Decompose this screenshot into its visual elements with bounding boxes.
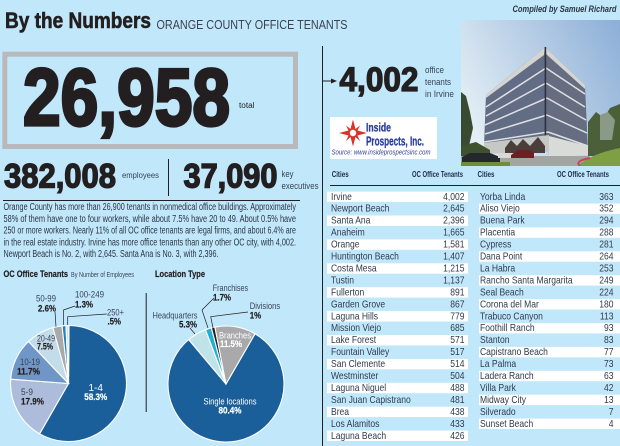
table: cities column 2: 77 (604, 347, 614, 357)
table: cities column 2: 180 (599, 299, 614, 309)
table: cities column 1: 571 (450, 335, 464, 345)
curb (578, 158, 590, 166)
table: cities column 1: 685 (450, 323, 464, 333)
stat: Irvine tenants: tenants (425, 77, 451, 88)
stat: Irvine tenants: office (425, 65, 444, 76)
table: cities column 1: Anaheim (331, 227, 365, 238)
slice labels: 250+ (107, 308, 124, 318)
table: cities column 1: Brea (331, 406, 350, 417)
stat: employees: 382,008 (4, 158, 116, 196)
slice labels: 11.5% (220, 339, 242, 350)
table: cities column 2: 7 (609, 406, 614, 417)
slice labels: 50-99 (36, 294, 56, 304)
table: cities column 1: Fountain Valley (331, 347, 390, 357)
table: cities column 2: 294 (599, 215, 614, 226)
slice labels: 2.6% (38, 304, 56, 314)
table: cities column 1: 433 (450, 418, 464, 429)
table header: second column: Cities (478, 169, 495, 179)
table: cities column 2: 363 (599, 191, 614, 202)
heading: location chart: Location Type (155, 269, 205, 280)
table: cities column 2: Placentia (480, 227, 516, 238)
table: cities column 2: 253 (599, 263, 614, 274)
table: cities column 2: Dana Point (480, 251, 523, 262)
slice labels (17, 290, 124, 408)
slice labels: 11.7% (17, 366, 40, 378)
total number: 26,958 (23, 53, 230, 143)
slice labels: 100-249 (75, 290, 104, 300)
slice labels: 1-4 (88, 383, 103, 394)
text block: summary: Newport Beach is No. 2, with 2,645. Santa Ana is No. 3, with 2,396. (4, 249, 218, 260)
table: cities column 1: Costa Mesa (331, 263, 377, 274)
leader lines (190, 298, 248, 334)
table: cities column 2: 42 (604, 382, 614, 393)
table: cities column 1: 426 (450, 430, 464, 441)
slice labels: 1.3% (75, 300, 93, 310)
table: cities column 1: 1,215 (443, 263, 464, 274)
table: cities column 1: Lake Forest (331, 335, 376, 345)
shrubs (505, 137, 545, 153)
table: cities column 1: 1,581 (443, 239, 464, 250)
table: cities column 2: Aliso Viejo (480, 203, 520, 214)
text block: summary: 58% of them have one to four workers, while about 7.5% have 20 to 49. About 0.5% have (4, 214, 296, 225)
slice labels: 1.7% (213, 292, 231, 304)
table: cities column 2: 288 (599, 227, 614, 238)
roof edge (486, 47, 545, 98)
table: cities column 1: 891 (450, 287, 464, 298)
table: cities column 1: Laguna Hills (331, 311, 378, 321)
table: cities column 2: Silverado (480, 406, 516, 417)
slice labels: Single locations (204, 396, 257, 408)
table: cities column 1: San Juan Capistrano (331, 394, 411, 405)
lower level (549, 136, 588, 158)
pie chart: location type (152, 283, 284, 442)
table: cities column 1: 1,137 (443, 275, 464, 286)
slice labels: 17.9% (21, 396, 44, 408)
arrow (323, 80, 332, 82)
table: cities column 2: Capistrano Beach (480, 347, 548, 357)
table: cities column 2: Cypress (480, 239, 512, 250)
table: cities column 2: Stanton (480, 335, 509, 345)
table: cities column 2: Seal Beach (480, 287, 524, 298)
slice labels: 80.4% (218, 406, 242, 416)
table header: first column: Cities (332, 169, 349, 179)
table: cities column 1: Santa Ana (331, 215, 371, 226)
icon: compass star (339, 120, 367, 146)
table: cities column 1: 517 (450, 347, 464, 357)
table: cities column 1: Newport Beach (331, 203, 389, 214)
table: cities column 1: 438 (450, 406, 464, 417)
table: cities column 1: San Clemente (331, 359, 385, 369)
table: cities column 2: 113 (600, 311, 614, 321)
logo: Inside Prospects (330, 117, 437, 159)
table: cities column 1: Orange (331, 239, 360, 250)
table: cities column 2: 13 (604, 394, 614, 405)
subtitle: ORANGE COUNTY OFFICE TENANTS (156, 17, 348, 32)
slice labels: 1% (250, 310, 262, 322)
trees (461, 92, 473, 150)
table: cities column 2: 249 (599, 275, 614, 286)
table: cities column 1: 867 (450, 299, 464, 309)
stat: Irvine tenants: 4,002 (340, 61, 418, 99)
table: cities column 1: 514 (450, 359, 464, 369)
table: cities column 2: La Habra (480, 263, 516, 274)
table: cities column 1: 481 (450, 394, 464, 405)
table: cities column 2: Buena Park (480, 215, 525, 226)
table: cities column 2: Yorba Linda (480, 191, 526, 202)
text block: summary: 250 or more workers. Nearly 11% of all OC office tenants are legal firms, and about 6.4% are (4, 226, 296, 237)
total label: total (239, 101, 255, 110)
slice labels: 5-9 (21, 387, 33, 398)
table: cities column 1: 2,396 (443, 215, 464, 226)
text block: summary: in the real estate industry. Irvine has more office tenants than any other OC city, with 4,002. (4, 237, 296, 248)
table: cities column 2: 4 (609, 418, 614, 429)
stat: Irvine tenants: in Irvine (425, 89, 454, 100)
table header: first column (332, 169, 463, 179)
heading: employees chart (4, 269, 134, 280)
leader lines (55, 306, 107, 327)
table: cities column 1: 1,665 (443, 227, 464, 238)
table: cities column 1: Huntington Beach (331, 251, 399, 262)
cars (462, 153, 500, 162)
table: cities column 1: Mission Viejo (331, 323, 381, 333)
slice labels: Divisions (250, 301, 280, 312)
table: cities column 2: Trabuco Canyon (480, 311, 543, 321)
table: cities column 1 (327, 191, 468, 441)
stat: key executives: key (282, 169, 294, 179)
text block: summary: Orange County has more than 26,900 tenants in nonmedical office buildings. Approximately (4, 202, 296, 213)
table: cities column 2 (479, 191, 620, 429)
stat: key executives: executives (282, 181, 319, 191)
table: cities column 2: 264 (599, 251, 614, 262)
table: cities column 2: 224 (599, 287, 614, 298)
table: cities column 1: Irvine (331, 191, 352, 202)
title: By the Numbers (5, 8, 151, 33)
stat: key executives: 37,090 (184, 158, 278, 196)
table: cities column 2: 93 (604, 323, 614, 333)
panel: total tenants (5, 53, 296, 146)
grass (461, 162, 510, 166)
table: cities column 2: La Palma (480, 359, 517, 369)
logo: Inside Prospects: Prospects, Inc. (366, 134, 424, 148)
table header: second column (478, 169, 609, 179)
pie chart: tenants by employees (11, 290, 126, 441)
table: cities column 2: Foothill Ranch (480, 323, 535, 333)
table: cities column 1: Garden Grove (331, 299, 385, 309)
table: cities column 1: Laguna Beach (331, 430, 386, 441)
table: cities column 2: Sunset Beach (480, 418, 533, 429)
table: cities column 1: Los Alamitos (331, 418, 380, 429)
building left face (484, 47, 549, 146)
table: cities column 1: 2,645 (443, 203, 464, 214)
heading: employees chart: OC Office Tenants (4, 269, 68, 280)
table: cities column 2: Villa Park (480, 382, 516, 393)
table: cities column 1: Tustin (331, 275, 354, 286)
table: cities column 2: Rancho Santa Margarita (480, 275, 573, 286)
table: cities column 2: 352 (599, 203, 614, 214)
table: cities column 2: Corona del Mar (480, 299, 539, 309)
table: cities column 1: 1,407 (443, 251, 464, 262)
building right face (545, 47, 588, 156)
table: cities column 1: 488 (450, 382, 464, 393)
slice labels: 10-19 (20, 357, 40, 368)
slice labels: 5.3% (179, 320, 197, 330)
table: cities column 1: 504 (450, 370, 464, 381)
slice labels: 7.5% (37, 342, 53, 352)
table: cities column 2: 73 (604, 359, 614, 369)
table: cities column 1: Fullerton (331, 287, 364, 298)
table: cities column 1: Westminster (331, 370, 378, 381)
table: cities column 2: 281 (599, 239, 614, 250)
logo: Inside Prospects: Inside (366, 120, 391, 134)
photo: office building (461, 20, 620, 166)
table header: first column: OC Office Tenants (412, 169, 463, 179)
road (461, 156, 590, 166)
table: cities column 1: 4,002 (443, 191, 464, 202)
table: cities column 2: 83 (604, 335, 614, 345)
table: cities column 1: Laguna Niguel (331, 382, 386, 393)
slice labels: 58.3% (84, 392, 108, 403)
table: cities column 2: Ladera Ranch (480, 370, 534, 381)
slice labels (152, 283, 280, 416)
logo: Inside Prospects: Source: www.insideprospectsinc.com (332, 150, 431, 156)
building bands (484, 68, 588, 146)
table: cities column 1: 779 (450, 311, 464, 321)
text block: summary (4, 202, 296, 260)
slice labels: .5% (108, 316, 121, 328)
table: cities column 2: Midway City (480, 394, 526, 405)
stat: employees: employees (122, 170, 159, 180)
heading: employees chart: By Number of Employees (71, 270, 134, 279)
slice labels: Branches (219, 330, 251, 342)
slice labels: Franchises (213, 283, 248, 294)
slice labels: Headquarters (152, 310, 198, 322)
table: cities column 2: 63 (604, 370, 614, 381)
slice labels: 20-49 (37, 334, 55, 344)
